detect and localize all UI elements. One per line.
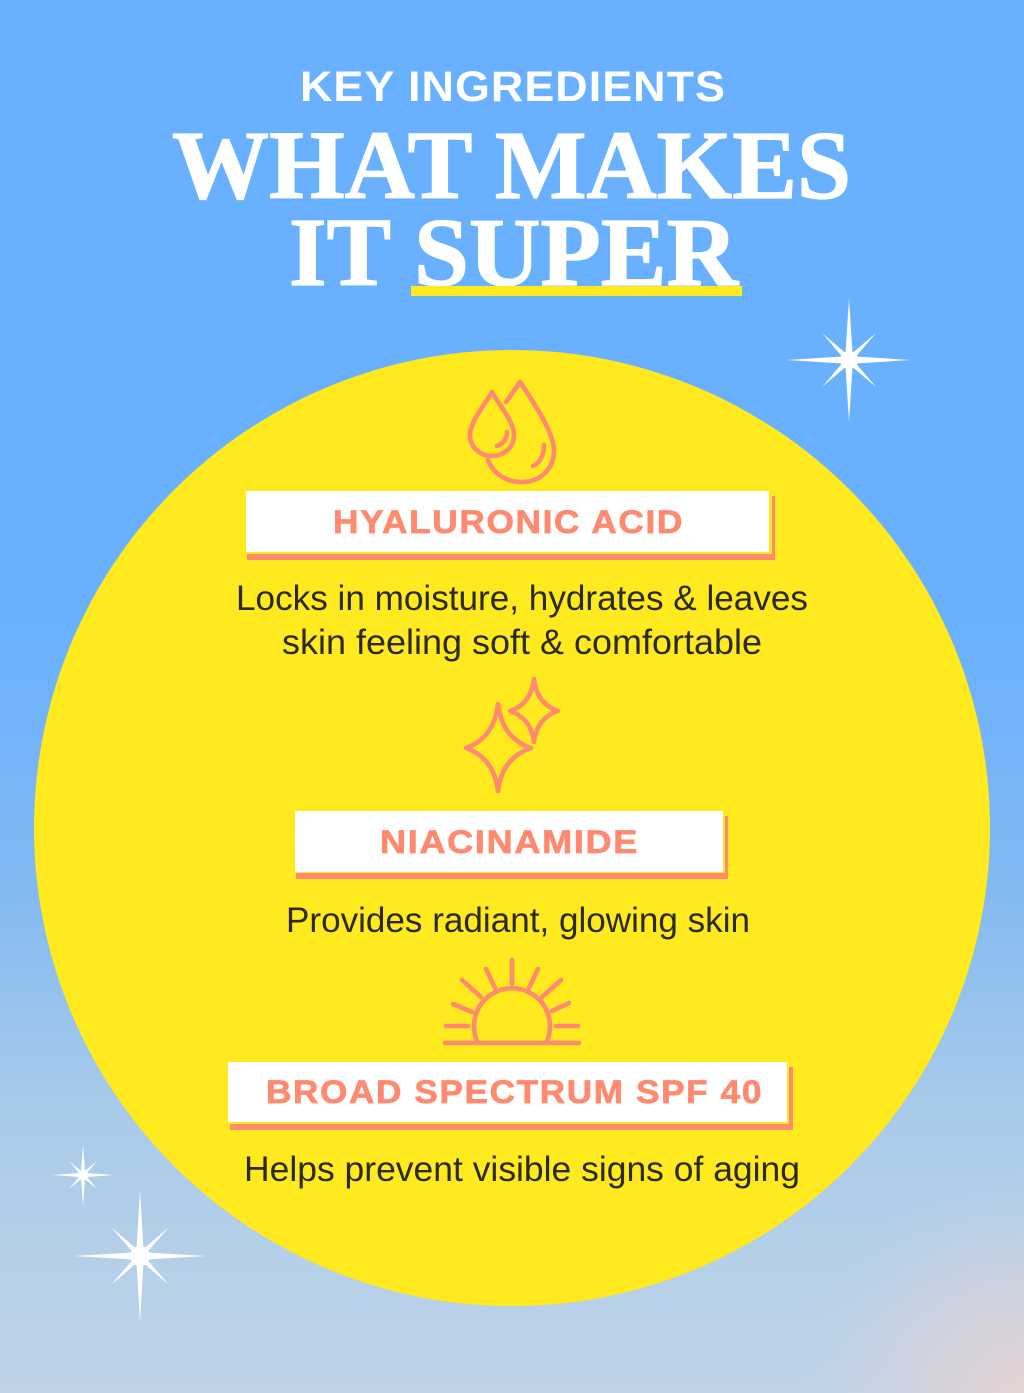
- title: WHAT MAKES: [172, 112, 851, 219]
- description: hyaluronic acid: Locks in moisture, hydrates & leaves: [236, 579, 808, 618]
- title: [172, 112, 851, 306]
- description: hyaluronic acid: skin feeling soft & comfortable: [282, 623, 762, 662]
- description: niacinamide: Provides radiant, glowing skin: [286, 901, 750, 940]
- title underline: [411, 286, 742, 296]
- ingredient label: hyaluronic acid: [246, 491, 775, 560]
- icon: rising sun: [445, 960, 579, 1043]
- description: hyaluronic acid: [236, 579, 808, 662]
- sparkle: large bottom left: [74, 1190, 206, 1322]
- ingredient label: broad spectrum spf 40: [228, 1062, 793, 1130]
- ingredient label: niacinamide: NIACINAMIDE: [380, 824, 639, 860]
- icon: sparkles: [466, 679, 558, 791]
- sparkle: small bottom left: [52, 1144, 114, 1206]
- ingredient label: niacinamide: [295, 811, 728, 879]
- description: broad spectrum spf 40: Helps prevent visible signs of aging: [244, 1150, 800, 1189]
- icon: water drops: [470, 382, 554, 482]
- title: IT: [289, 199, 391, 306]
- yellow circle: [34, 350, 990, 1306]
- eyebrow heading: KEY INGREDIENTS: [300, 63, 726, 111]
- ingredient label: hyaluronic acid: HYALURONIC ACID: [333, 504, 684, 540]
- title: SUPER: [414, 199, 739, 306]
- sparkle: top right: [787, 298, 911, 422]
- ingredient label: broad spectrum spf 40: BROAD SPECTRUM SPF 40: [266, 1074, 763, 1110]
